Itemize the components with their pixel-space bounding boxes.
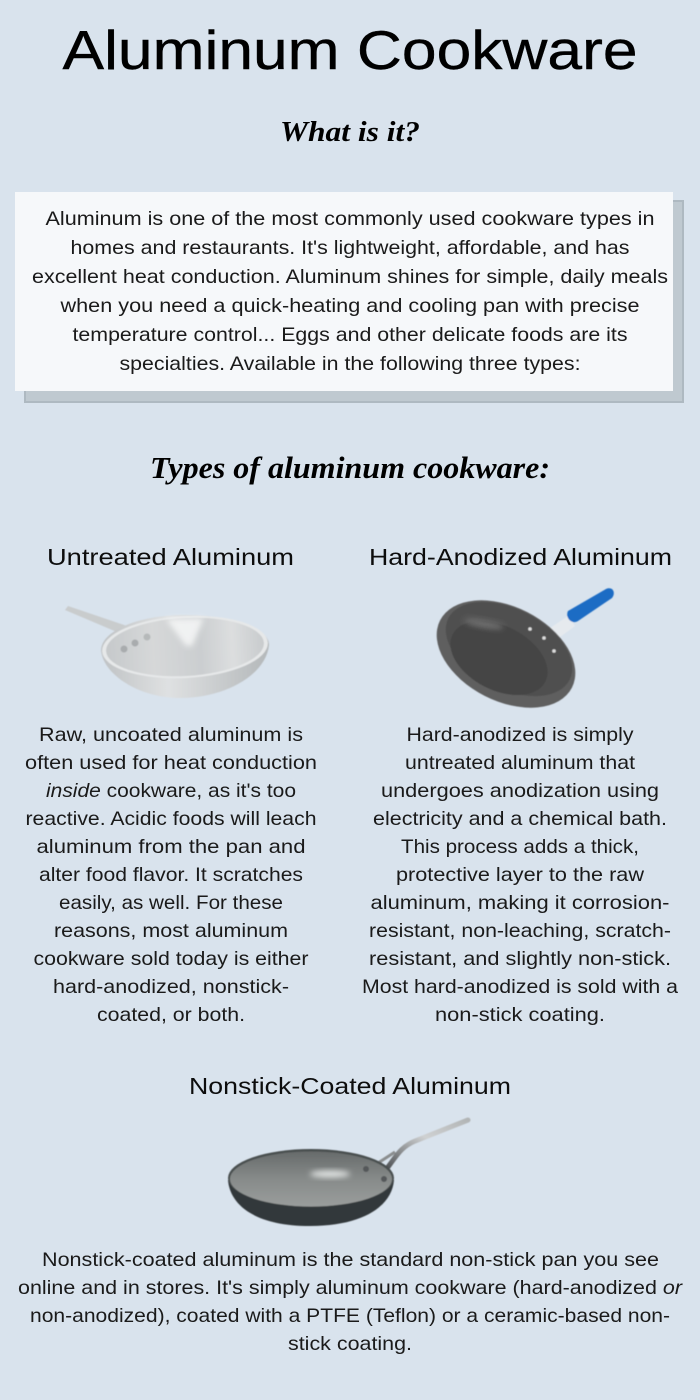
introduction text: Aluminum is one of the most commonly used cookware types in — [46, 208, 654, 230]
description: untreated aluminum: often used for heat conduction — [25, 752, 317, 774]
description: hard-anodized aluminum: undergoes anodization using — [381, 780, 659, 802]
description: hard-anodized aluminum: Hard-anodized is simply — [406, 724, 634, 746]
description: hard-anodized aluminum: This process adds a thick, — [401, 836, 639, 858]
description: untreated aluminum: easily, as well. For these — [59, 892, 283, 914]
panel: introduction — [15, 192, 683, 402]
introduction text — [32, 208, 668, 375]
column: untreated aluminum — [25, 544, 317, 1026]
description: untreated aluminum: reasons, most aluminum — [54, 920, 288, 942]
description: untreated aluminum: alter food flavor. It scratches — [39, 864, 303, 886]
description: hard-anodized aluminum: resistant, and slightly non-stick. — [369, 948, 671, 970]
description: untreated aluminum: hard-anodized, nonstick- — [53, 976, 289, 998]
description: hard-anodized aluminum: aluminum, making it corrosion- — [370, 892, 670, 914]
description: untreated aluminum: aluminum from the pan and — [36, 836, 306, 858]
description: nonstick-coated aluminum: online and in stores. It's simply aluminum cookware (hard-anodized or — [18, 1277, 684, 1299]
title: Aluminum Cookware — [62, 19, 638, 81]
description: untreated aluminum: Raw, uncoated aluminum is — [39, 724, 303, 746]
description: hard-anodized aluminum: protective layer to the raw — [396, 864, 645, 886]
introduction text: homes and restaurants. It's lightweight, affordable, and has — [70, 237, 630, 259]
column: hard-anodized aluminum — [362, 544, 678, 1026]
description: nonstick-coated aluminum: Nonstick-coated aluminum is the standard non-stick pan you see — [42, 1249, 659, 1271]
description: untreated aluminum: cookware sold today is either — [34, 948, 309, 970]
description: hard-anodized aluminum: non-stick coating. — [435, 1004, 605, 1026]
heading: untreated aluminum: Untreated Aluminum — [47, 544, 294, 570]
description: untreated aluminum: coated, or both. — [97, 1004, 245, 1026]
introduction text: when you need a quick-heating and cooling pan with precise — [59, 295, 640, 317]
introduction text: specialties. Available in the following three types: — [120, 353, 580, 375]
description: hard-anodized aluminum: untreated aluminum that — [405, 752, 636, 774]
description: hard-anodized aluminum: resistant, non-leaching, scratch- — [369, 920, 671, 942]
heading: what is it: What is it? — [280, 116, 420, 148]
description: untreated aluminum: reactive. Acidic foods will leach — [26, 808, 316, 830]
section: nonstick-coated aluminum — [18, 1073, 684, 1355]
description: hard-anodized aluminum: Most hard-anodized is sold with a — [362, 976, 678, 998]
description: nonstick-coated aluminum — [18, 1249, 684, 1355]
introduction text: temperature control... Eggs and other delicate foods are its — [72, 324, 628, 346]
description: hard-anodized aluminum — [362, 724, 678, 1026]
description: nonstick-coated aluminum: non-anodized), coated with a PTFE (Teflon) or a ceramic-based non- — [30, 1305, 670, 1327]
heading: nonstick-coated aluminum: Nonstick-Coated Aluminum — [189, 1073, 511, 1099]
panel shadow — [25, 201, 683, 402]
icon: untreated aluminum pan — [65, 606, 270, 698]
panel card — [15, 192, 673, 391]
description: untreated aluminum — [25, 724, 317, 1026]
introduction text: excellent heat conduction. Aluminum shines for simple, daily meals — [32, 266, 668, 288]
description: untreated aluminum: inside cookware, as it's too — [46, 780, 296, 802]
icon: hard-anodized pan — [419, 579, 614, 729]
description: nonstick-coated aluminum: stick coating. — [288, 1333, 412, 1355]
heading: types of aluminum cookware: Types of aluminum cookware: — [150, 450, 550, 485]
heading: hard-anodized aluminum: Hard-Anodized Aluminum — [369, 544, 672, 570]
icon: nonstick-coated pan — [228, 1120, 468, 1226]
description: hard-anodized aluminum: electricity and a chemical bath. — [373, 808, 667, 830]
